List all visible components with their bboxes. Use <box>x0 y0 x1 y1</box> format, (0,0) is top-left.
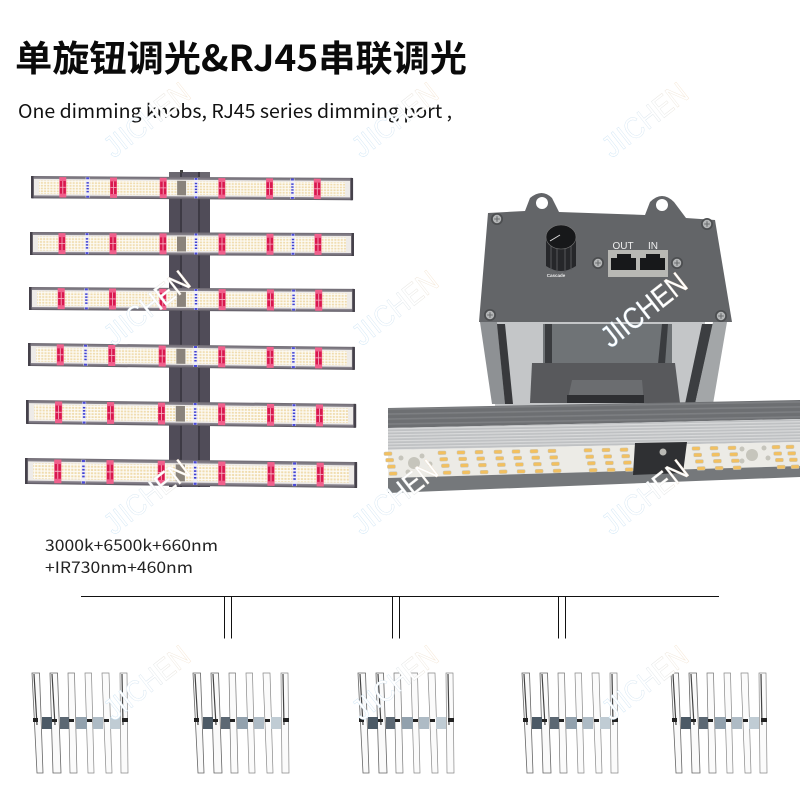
subtitle: One dimming knobs, RJ45 series dimming port , <box>18 97 452 124</box>
housing body <box>480 322 727 406</box>
LED bar 4 <box>28 343 355 370</box>
mounting bracket <box>633 442 687 475</box>
LED bar 1 <box>31 176 353 200</box>
LED bar 6 <box>25 458 357 488</box>
series fixture 2 <box>193 673 289 773</box>
series fixture 4 <box>522 673 618 773</box>
silver ribbed band <box>388 419 800 450</box>
series fixture 1 <box>32 673 128 773</box>
lower rail <box>388 466 800 493</box>
LED bar 3 <box>29 287 355 312</box>
central support column <box>169 170 210 487</box>
control box with knob and RJ45 ports <box>479 193 732 406</box>
JIICHEN watermarks: JIICHEN <box>596 640 695 727</box>
spectrum label: 3000k+6500k+660nm <box>45 534 218 556</box>
OUT label: OUT <box>612 241 634 252</box>
JIICHEN watermarks: JIICHEN <box>98 454 197 541</box>
JIICHEN watermarks: JIICHEN <box>346 265 445 352</box>
mounting holes <box>536 197 668 211</box>
grow light fixture with six LED bars <box>25 170 357 488</box>
JIICHEN watermarks: JIICHEN <box>346 77 445 164</box>
IN label: IN <box>648 241 658 252</box>
JIICHEN watermarks: JIICHEN <box>595 267 694 354</box>
JIICHEN watermarks: JIICHEN <box>98 265 197 352</box>
series fixture 3 <box>358 673 454 773</box>
series fixture 5 <box>671 673 767 773</box>
title: 单旋钮调光&RJ45串联调光 <box>15 30 467 82</box>
JIICHEN watermarks: JIICHEN <box>596 454 695 541</box>
series connection lines <box>81 596 719 638</box>
Cascade label: Cascade <box>547 273 566 278</box>
spectrum label second line: +IR730nm+460nm <box>45 556 193 578</box>
white LED board <box>388 442 800 478</box>
corner and port screws <box>484 213 727 322</box>
top plate <box>479 193 732 322</box>
LED bar 5 <box>26 400 356 428</box>
JIICHEN watermarks: JIICHEN <box>596 77 695 164</box>
chip clusters <box>398 446 770 474</box>
LED bar 2 <box>30 232 354 256</box>
JIICHEN watermarks: JIICHEN <box>98 77 197 164</box>
LED columns <box>384 445 799 476</box>
JIICHEN watermarks: JIICHEN <box>346 640 445 727</box>
JIICHEN watermarks: JIICHEN <box>98 640 197 727</box>
JIICHEN watermarks: JIICHEN <box>346 454 445 541</box>
JIICHEN watermarks <box>98 77 695 727</box>
dimming knob <box>546 225 576 272</box>
dark top band <box>388 400 800 428</box>
RJ45 ports <box>608 250 668 277</box>
close-up LED bar <box>384 400 800 493</box>
